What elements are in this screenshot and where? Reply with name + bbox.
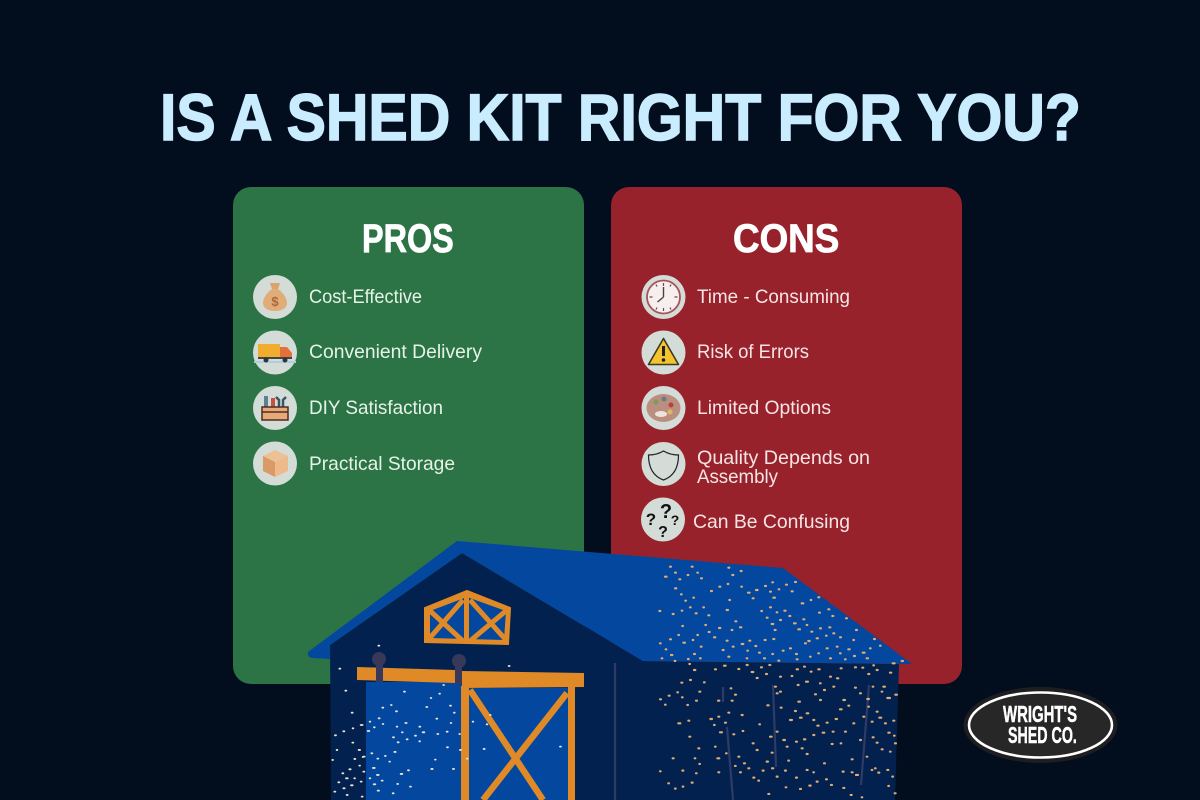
item: quality depends on assembly: Quality Depends on <box>697 447 870 469</box>
wall lines <box>615 663 869 800</box>
item: limited options <box>642 386 831 430</box>
rail hangers <box>372 652 466 684</box>
item: can be confusing: ? <box>658 524 668 541</box>
item: can be confusing: ? <box>646 510 656 529</box>
title: IS A SHED KIT RIGHT FOR YOU? <box>160 81 1081 155</box>
speckles: door and left wall <box>332 646 561 797</box>
item: can be confusing: Can Be Confusing <box>693 511 850 533</box>
item: quality depends on assembly <box>642 442 870 488</box>
item: can be confusing: ? <box>671 512 679 528</box>
item: limited options: Limited Options <box>697 397 831 419</box>
item: diy satisfaction <box>253 386 443 430</box>
illustration: shed <box>308 541 912 800</box>
item: convenient delivery: Convenient Delivery <box>309 341 482 363</box>
item: cost-effective <box>253 275 422 319</box>
item: can be confusing: ? <box>660 501 672 523</box>
item: risk of errors: Risk of Errors <box>697 341 809 363</box>
logo: wright's shed co. <box>964 687 1118 763</box>
item: can be confusing <box>641 498 850 542</box>
logo: wright's shed co.: WRIGHT'S <box>1003 702 1077 728</box>
item: quality depends on assembly: Assembly <box>697 466 778 488</box>
shed wall <box>330 553 899 800</box>
item: practical storage <box>253 442 455 486</box>
item: time consuming <box>642 275 850 319</box>
gable window <box>425 591 510 644</box>
item: diy satisfaction: DIY Satisfaction <box>309 397 443 419</box>
item: practical storage: Practical Storage <box>309 453 455 475</box>
logo: wright's shed co.: SHED CO. <box>1008 724 1077 749</box>
item: risk of errors <box>642 330 809 374</box>
item: cost-effective: Cost-Effective <box>309 286 422 308</box>
speckles: roof and right wall <box>659 567 903 663</box>
item: time consuming: Time - Consuming <box>697 286 850 308</box>
item: cost-effective: $ <box>271 294 279 309</box>
panel: pros <box>233 187 584 684</box>
heading: cons: CONS <box>733 217 839 261</box>
sliding door panel <box>366 682 462 800</box>
shed roof <box>308 541 912 664</box>
heading: pros: PROS <box>362 216 454 261</box>
panel: cons <box>611 187 962 684</box>
door frame <box>461 671 584 800</box>
item: convenient delivery <box>253 330 482 374</box>
door rail <box>357 667 455 683</box>
